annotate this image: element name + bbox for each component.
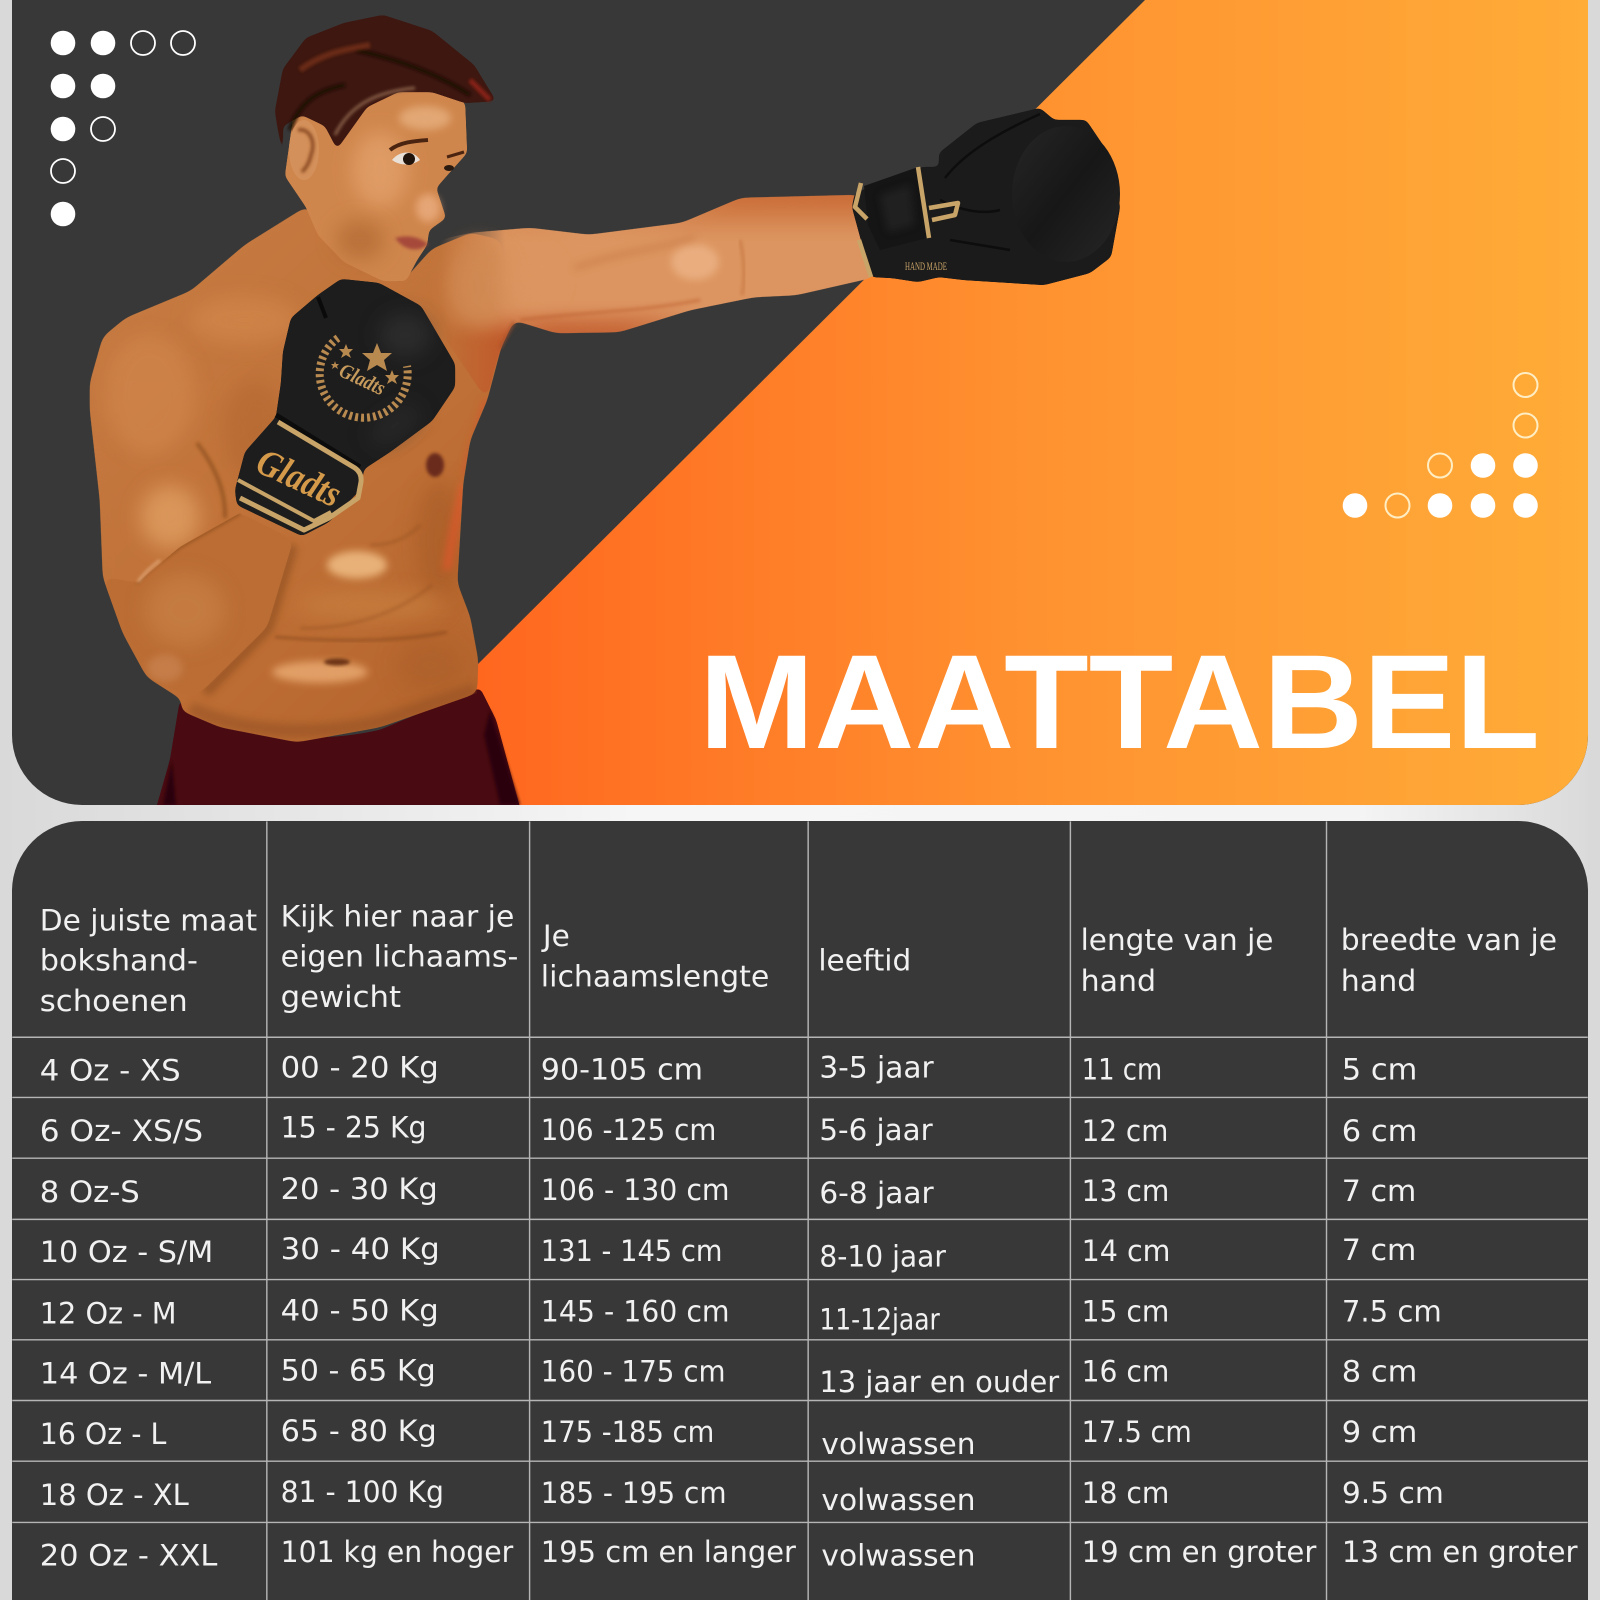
- table header row: Kijk hier naar je: [281, 900, 514, 934]
- hand made label: HAND MADE: [905, 259, 947, 273]
- table row: 4 Oz: 3-5 jaar: [819, 1051, 935, 1085]
- gold strap trim: [855, 167, 958, 277]
- table row: 12 Oz: 15 cm: [1082, 1294, 1169, 1328]
- table row: 12 Oz: [40, 1293, 1442, 1337]
- glove logo text: Gladts: [336, 358, 389, 400]
- shorts: [157, 690, 520, 805]
- table row: 18 Oz: 81 - 100 Kg: [281, 1475, 444, 1509]
- navel: [324, 658, 350, 666]
- face shading: [336, 106, 451, 260]
- table row: 4 Oz: 11 cm: [1082, 1053, 1162, 1087]
- table row: 20 Oz: 195 cm en langer: [541, 1535, 797, 1569]
- ear: [289, 120, 319, 180]
- table row: 14 Oz: 8 cm: [1342, 1355, 1417, 1389]
- table row: 18 Oz: 18 Oz - XL: [40, 1478, 189, 1512]
- table row: 8 Oz: [40, 1172, 1416, 1210]
- table row: 10 Oz: 30 - 40 Kg: [281, 1232, 440, 1266]
- table row: 10 Oz: 8-10 jaar: [819, 1239, 947, 1273]
- table header row: De juiste maat: [40, 904, 257, 938]
- table row: 4 Oz: 5 cm: [1342, 1053, 1417, 1087]
- table row: 12 Oz: 7.5 cm: [1342, 1294, 1442, 1328]
- table row: 14 Oz: [40, 1354, 1417, 1399]
- torso highlights and shadows: [105, 296, 487, 731]
- shorts shading: [163, 710, 520, 805]
- extended arm: [440, 195, 875, 400]
- title: MAATTABEL: [699, 628, 1540, 777]
- table row: 18 Oz: 9.5 cm: [1342, 1476, 1444, 1510]
- table row: 10 Oz: 131 - 145 cm: [541, 1234, 722, 1268]
- eye and brow: [390, 140, 464, 171]
- torso: [90, 207, 514, 742]
- hair highlights: [290, 45, 490, 135]
- table row: 6 Oz: 15 - 25 Kg: [281, 1111, 427, 1145]
- neck and face: [285, 80, 467, 281]
- table row: 8 Oz: 20 - 30 Kg: [281, 1172, 438, 1206]
- table header row: lengte van je: [1081, 923, 1273, 957]
- wrist seam: [276, 415, 360, 467]
- table row: 12 Oz: 40 - 50 Kg: [281, 1293, 439, 1327]
- table row: 6 Oz: 6 Oz- XS/S: [40, 1114, 203, 1148]
- table row: 8 Oz: 7 cm: [1342, 1174, 1416, 1208]
- table row: 16 Oz: 175 -185 cm: [541, 1415, 714, 1449]
- lips: [395, 236, 428, 249]
- table row: 12 Oz: 11-12jaar: [819, 1303, 940, 1337]
- table row: 6 Oz: 6 cm: [1342, 1114, 1417, 1148]
- table row: 4 Oz: [40, 1051, 1417, 1088]
- hero dark background: [12, 0, 1588, 805]
- forearm shading: [137, 513, 240, 682]
- illustration: boxer: [90, 15, 1120, 830]
- table row: 8 Oz: 13 cm: [1082, 1174, 1169, 1208]
- table row: 6 Oz: 5-6 jaar: [819, 1113, 933, 1147]
- table row: 4 Oz: 90-105 cm: [541, 1053, 703, 1087]
- table header row: hand: [1081, 964, 1156, 998]
- table grid: [12, 821, 1588, 1600]
- front padding: [1101, 142, 1120, 203]
- table row: 6 Oz: 106 -125 cm: [541, 1113, 716, 1147]
- table row: 16 Oz: 16 Oz - L: [40, 1417, 167, 1451]
- table header row: bokshand-: [40, 943, 198, 977]
- table row: 14 Oz: 160 - 175 cm: [541, 1355, 726, 1389]
- boxing glove: guard hand: [235, 279, 455, 536]
- table row: 18 Oz: volwassen: [821, 1483, 976, 1517]
- glove logo stars: [331, 343, 399, 384]
- table header row: breedte van je: [1341, 923, 1557, 957]
- table row: 18 Oz: [40, 1475, 1444, 1517]
- orange diagonal shape: [470, 0, 1588, 805]
- table row: 20 Oz: [40, 1535, 1578, 1572]
- table row: 20 Oz: 101 kg en hoger: [281, 1535, 514, 1569]
- boxing glove: punching hand: [852, 108, 1120, 285]
- strap shine: [884, 190, 910, 228]
- table row: 20 Oz: 13 cm en groter: [1342, 1535, 1578, 1569]
- table row: 18 Oz: 185 - 195 cm: [541, 1476, 727, 1510]
- wrist strap: [864, 168, 916, 189]
- thumb and palm detail: [940, 114, 1040, 250]
- cuff gold trim: [240, 422, 361, 530]
- glove logo wreath: [320, 338, 408, 418]
- table row: 10 Oz: 10 Oz - S/M: [40, 1235, 213, 1269]
- glove body shine: [379, 313, 431, 357]
- table row: 16 Oz: 17.5 cm: [1082, 1415, 1192, 1449]
- table row: 16 Oz: 9 cm: [1342, 1415, 1417, 1449]
- cuff brand text: Gladts: [250, 441, 348, 516]
- nipple: [426, 453, 444, 477]
- table row: 18 Oz: 18 cm: [1082, 1476, 1169, 1510]
- table row: 10 Oz: 7 cm: [1342, 1233, 1416, 1267]
- table row: 8 Oz: 106 - 130 cm: [541, 1173, 730, 1207]
- table header row: eigen lichaams-: [281, 939, 518, 973]
- table header row: gewicht: [281, 980, 401, 1014]
- table row: 8 Oz: 8 Oz-S: [40, 1175, 140, 1209]
- arm shading: [448, 238, 744, 348]
- table row: 10 Oz: 14 cm: [1082, 1234, 1170, 1268]
- table row: 16 Oz: 65 - 80 Kg: [281, 1414, 437, 1448]
- table row: 14 Oz: 13 jaar en ouder: [819, 1365, 1060, 1399]
- table row: 14 Oz: 16 cm: [1082, 1355, 1169, 1389]
- table row: 20 Oz: 20 Oz - XXL: [40, 1538, 218, 1572]
- table row: 12 Oz: 145 - 160 cm: [541, 1294, 730, 1328]
- table row: 10 Oz: [40, 1232, 1416, 1273]
- table header row: lichaamslengte: [541, 960, 769, 994]
- table row: 14 Oz: 50 - 65 Kg: [281, 1354, 436, 1388]
- hair: [275, 16, 494, 146]
- panel: hero: [12, 0, 1588, 830]
- table row: 4 Oz: 00 - 20 Kg: [281, 1051, 439, 1085]
- table row: 4 Oz: 4 Oz - XS: [40, 1054, 181, 1088]
- table row: 6 Oz: 12 cm: [1082, 1114, 1168, 1148]
- table row: 16 Oz: [40, 1414, 1417, 1461]
- table row: 14 Oz: 14 Oz - M/L: [40, 1357, 212, 1391]
- table row: 20 Oz: volwassen: [821, 1538, 976, 1572]
- panel: size table: [12, 821, 1588, 1600]
- table header row: [40, 900, 1557, 1018]
- table row: 16 Oz: volwassen: [821, 1427, 976, 1461]
- table row: 8 Oz: 6-8 jaar: [819, 1176, 935, 1210]
- elbow crease highlight: [138, 560, 160, 582]
- table header row: leeftid: [818, 943, 911, 977]
- table row: 6 Oz: [40, 1111, 1417, 1148]
- dot pattern: top left: [51, 31, 195, 226]
- table header row: hand: [1341, 964, 1416, 998]
- table row: 20 Oz: 19 cm en groter: [1082, 1535, 1317, 1569]
- table header row: schoenen: [40, 984, 188, 1018]
- table row: 12 Oz: 12 Oz - M: [40, 1296, 177, 1330]
- forearm: [106, 532, 291, 690]
- dot pattern: right: [1343, 373, 1538, 518]
- table header row: Je: [541, 919, 570, 953]
